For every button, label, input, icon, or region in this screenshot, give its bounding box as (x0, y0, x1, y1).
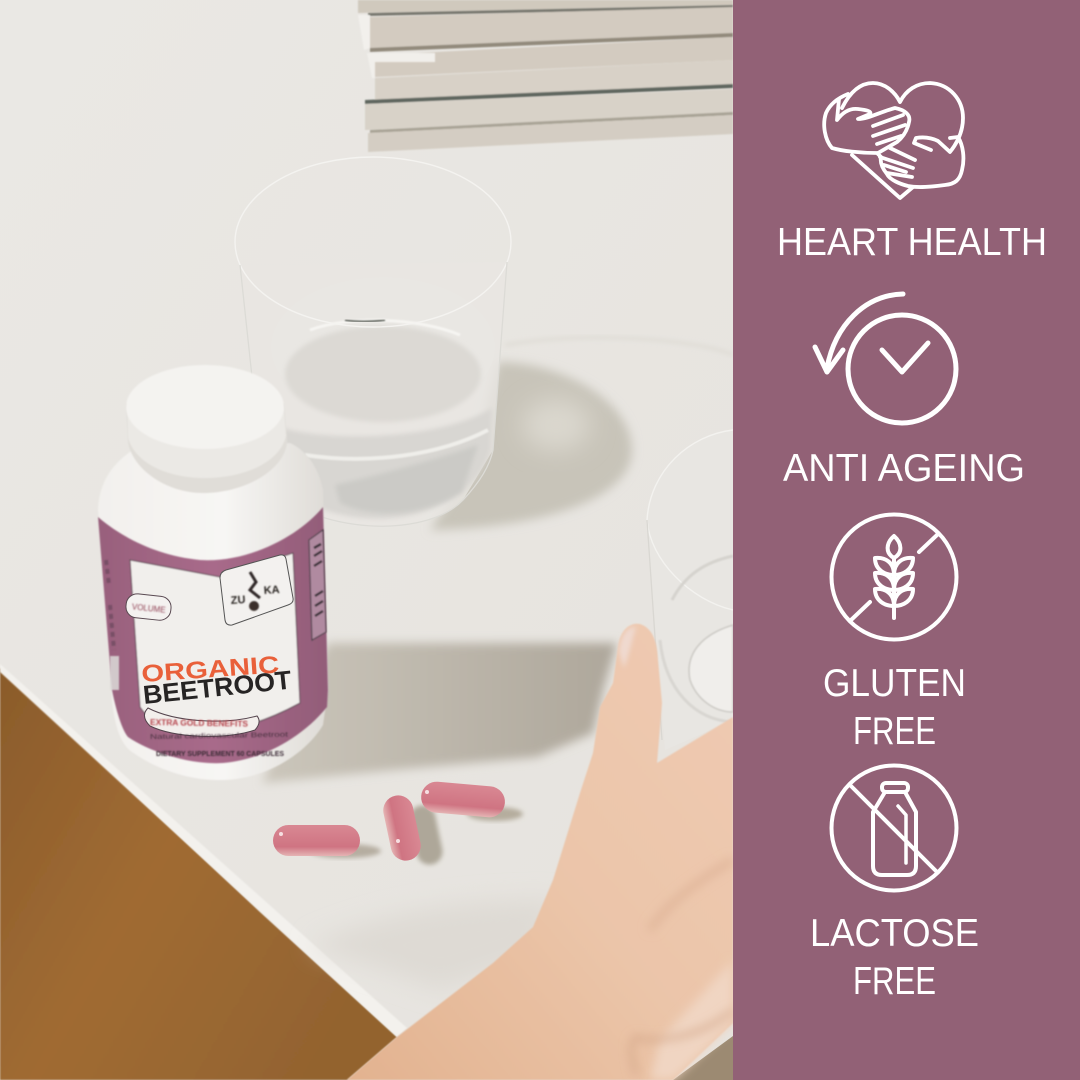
wooden floor (0, 668, 397, 1080)
label: lactose free (810, 912, 979, 1003)
label: heart health: HEART HEALTH (777, 221, 1047, 264)
logo box (220, 555, 293, 625)
capsule 1 (273, 825, 381, 858)
label: lactose free: FREE (853, 960, 936, 1003)
icon: anti ageing clock (815, 294, 956, 423)
hand (347, 624, 733, 1080)
icon: gluten free (832, 514, 956, 640)
faint ring of glass shadow (505, 338, 733, 355)
logo: KA (263, 584, 280, 597)
icon: lactose free (832, 766, 956, 890)
label: anti ageing: ANTI AGEING (783, 447, 1025, 490)
left side print and barcode (106, 560, 119, 690)
product name: ORGANIC (141, 651, 280, 688)
light caustic inside shadow (522, 399, 590, 451)
table edge highlight (0, 664, 407, 1037)
second water glass (647, 430, 733, 750)
knuckle shading (650, 860, 733, 930)
subtitle pill: EXTRA GOLD BENEFITS (150, 718, 249, 729)
shadow of glass (430, 362, 632, 530)
small print on label: DIETARY SUPPLEMENT 60 CAPSULES (156, 751, 284, 758)
icon: heart in hands (824, 83, 963, 198)
pale wrist (650, 960, 733, 1080)
volume pill (125, 593, 172, 621)
purple label band (98, 507, 328, 763)
shadow of bottle (262, 643, 617, 783)
label: gluten free (823, 662, 966, 753)
subtitle pill (144, 708, 259, 736)
product name: BEETROOT (141, 665, 293, 710)
small print on label (150, 732, 288, 758)
wrist crease (630, 1008, 733, 1064)
logo: ZU (230, 594, 246, 607)
volume pill: VOLUME (131, 602, 166, 615)
bottle body (98, 443, 328, 780)
water glass (235, 157, 511, 528)
floor corner lower right (673, 1036, 733, 1080)
photo: table scene (0, 0, 733, 1080)
capsule 3 (420, 780, 523, 821)
bottle cap (126, 365, 287, 493)
supplement bottle (98, 365, 328, 780)
label: gluten free: GLUTEN (823, 662, 966, 705)
small print on label: Natural cardiovascular Beetroot (150, 732, 288, 741)
label: lactose free: LACTOSE (810, 912, 979, 955)
stack of books (358, 0, 733, 152)
white label panel (130, 553, 300, 733)
panel: benefits sidebar (733, 0, 1080, 1080)
soft shadow on table near wrist (310, 907, 539, 981)
label: gluten free: FREE (853, 710, 936, 753)
side panel print (309, 530, 326, 640)
capsule 2 (380, 793, 445, 867)
thumb nail (619, 627, 636, 668)
logo (230, 572, 280, 611)
